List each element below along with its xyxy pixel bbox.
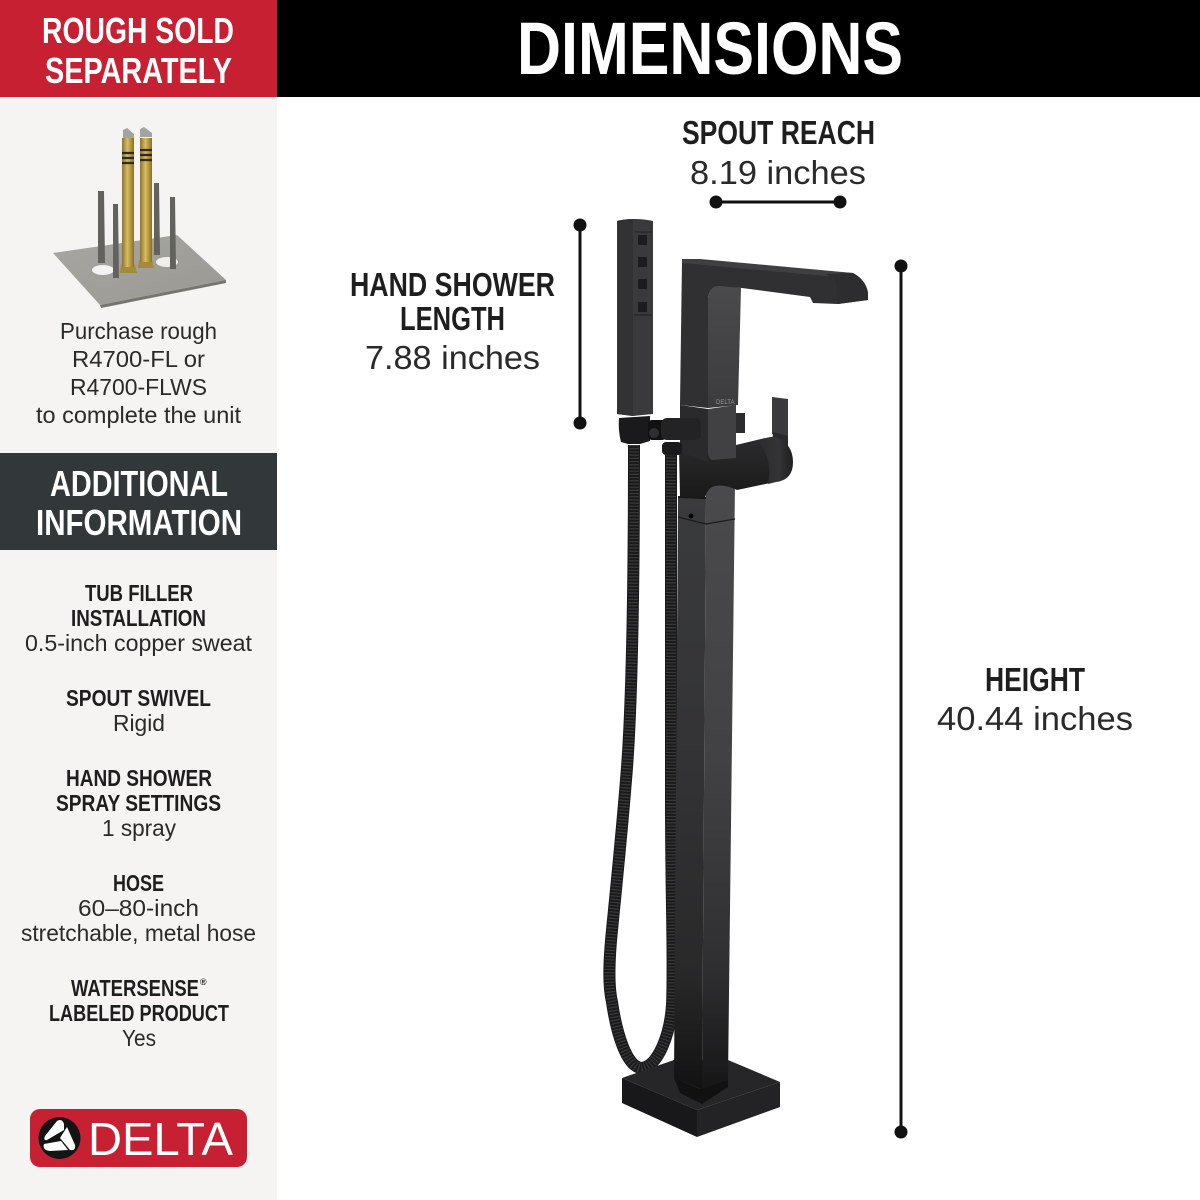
spec: tub filler installation — [25, 580, 253, 656]
rough purchase note: R4700-FL or — [72, 346, 205, 372]
hand shower — [617, 219, 653, 416]
logo: delta: DELTA — [88, 1113, 233, 1165]
spec: watersense labeled product — [49, 975, 229, 1051]
spec: tub filler installation: TUB FILLER — [85, 580, 193, 606]
spec: tub filler installation: INSTALLATION — [71, 605, 206, 631]
dimension: hand shower length: 7.88 inches — [365, 339, 540, 376]
spec: tub filler installation: 0.5-inch copper sweat — [25, 630, 253, 656]
spec: hand shower spray settings: 1 spray — [102, 815, 176, 841]
dimension: height: 40.44 inches — [937, 700, 1133, 737]
logo: delta — [30, 1109, 247, 1167]
dimension: hand shower length: HAND SHOWER — [350, 266, 555, 303]
faucet body and spout — [680, 259, 868, 462]
dimension: hand shower length: LENGTH — [400, 300, 505, 337]
dimension: spout reach: SPOUT REACH — [682, 114, 875, 151]
spec: watersense labeled product: LABELED PRODUCT — [49, 1000, 229, 1026]
dimension: height — [894, 260, 1133, 1138]
base plate — [622, 1060, 780, 1137]
wall mount holder — [619, 416, 701, 455]
heading: additional information: INFORMATION — [36, 502, 242, 543]
spec: watersense labeled product: ® — [200, 977, 207, 987]
lever handle and mixer — [679, 397, 793, 498]
title banner: dimensions: DIMENSIONS — [517, 7, 903, 90]
banner: rough sold separately: SEPARATELY — [45, 50, 232, 91]
rough purchase note: R4700-FLWS — [70, 374, 207, 400]
rough purchase note — [36, 318, 242, 428]
banner: rough sold separately — [0, 0, 277, 97]
spec: hand shower spray settings — [56, 765, 221, 841]
heading: additional information — [0, 453, 277, 550]
dimension: spout reach: 8.19 inches — [690, 154, 866, 191]
dimension: spout reach — [682, 114, 875, 208]
title banner: dimensions — [277, 0, 1200, 97]
spray outlet dot — [688, 514, 694, 518]
heading: additional information: ADDITIONAL — [50, 463, 228, 504]
hose — [609, 445, 673, 1068]
delta mark on spout: DELTA — [716, 400, 734, 406]
rough purchase note: Purchase rough — [60, 318, 217, 344]
faucet illustration — [609, 219, 868, 1137]
dimension: hand shower length — [350, 218, 586, 430]
spec: hose: stretchable, metal hose — [21, 920, 256, 946]
spec: spout swivel: SPOUT SWIVEL — [66, 685, 211, 711]
spec: hose: HOSE — [113, 870, 164, 896]
spec: hose — [21, 870, 256, 946]
spec: watersense labeled product: WATERSENSE — [71, 975, 199, 1001]
rough purchase note: to complete the unit — [36, 402, 242, 428]
sidebar panel — [0, 97, 277, 1200]
spec: hose: 60–80-inch — [78, 895, 199, 921]
column — [674, 484, 735, 1089]
spec: hand shower spray settings: HAND SHOWER — [66, 765, 212, 791]
banner: rough sold separately: ROUGH SOLD — [42, 10, 234, 51]
spec: watersense labeled product: Yes — [122, 1025, 156, 1051]
spec: spout swivel — [66, 685, 211, 736]
dimension: height: HEIGHT — [985, 661, 1085, 698]
rough valve product image — [53, 127, 226, 308]
spec: spout swivel: Rigid — [113, 710, 165, 736]
spec: hand shower spray settings: SPRAY SETTINGS — [56, 790, 221, 816]
